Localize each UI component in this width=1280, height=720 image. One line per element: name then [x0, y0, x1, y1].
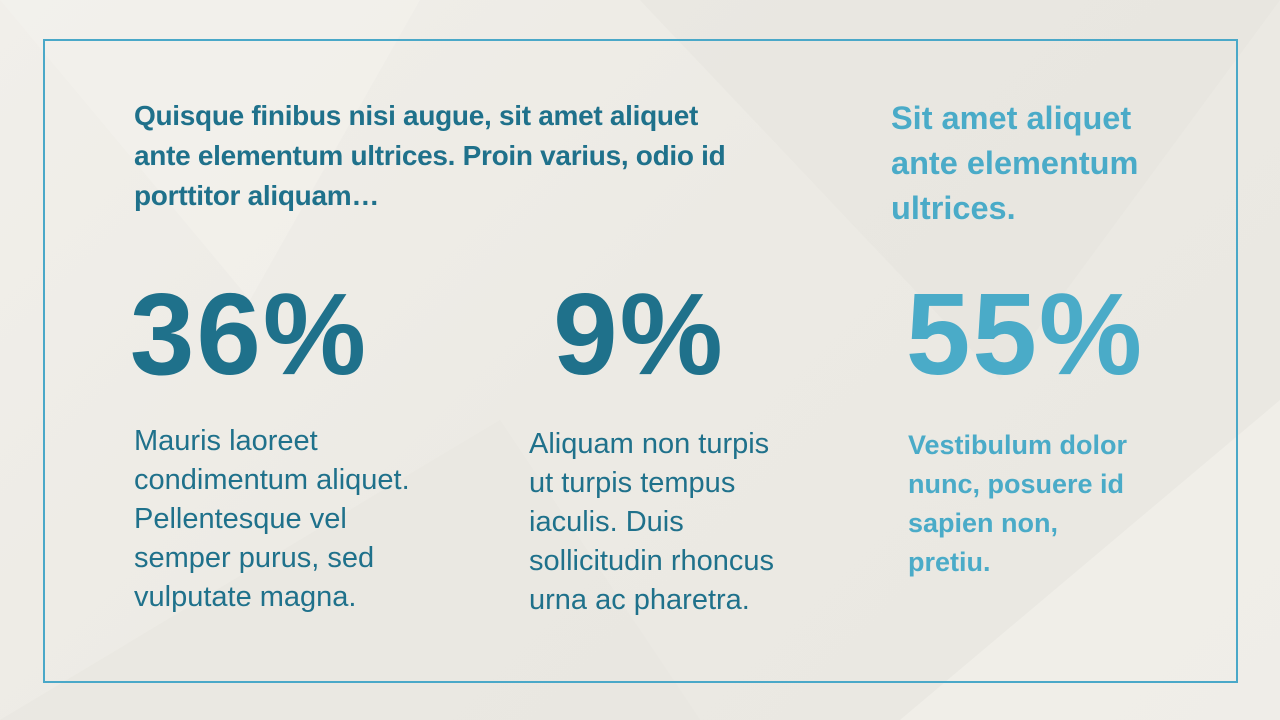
text column 2: iaculis. Duis [529, 506, 684, 538]
text column 1: vulputate magna. [134, 581, 356, 613]
text column 1: condimentum aliquet. [134, 464, 410, 496]
intro text [134, 100, 725, 211]
stat 9%: 9% [553, 269, 725, 399]
text column 1: Pellentesque vel [134, 503, 347, 535]
right heading: ultrices. [891, 190, 1016, 226]
text column 3: Vestibulum dolor [908, 430, 1127, 460]
stat 55%: 55% [906, 269, 1144, 399]
text column 2 [529, 428, 774, 616]
right heading [891, 100, 1138, 226]
text column 1 [134, 425, 410, 613]
text column 2: sollicitudin rhoncus [529, 545, 774, 577]
text column 3: nunc, posuere id [908, 469, 1124, 499]
right heading: Sit amet aliquet [891, 100, 1131, 136]
text column 3: pretiu. [908, 547, 991, 577]
stat 36%: 36% [130, 269, 368, 399]
text column 1: semper purus, sed [134, 542, 374, 574]
text column 2: Aliquam non turpis [529, 428, 769, 460]
text column 2: urna ac pharetra. [529, 584, 750, 616]
text column 2: ut turpis tempus [529, 467, 735, 499]
intro text: ante elementum ultrices. Proin varius, odio id [134, 140, 725, 171]
text column 3: sapien non, [908, 508, 1058, 538]
text column 1: Mauris laoreet [134, 425, 318, 457]
text column 3 [908, 430, 1127, 577]
intro text: Quisque finibus nisi augue, sit amet aliquet [134, 100, 698, 131]
intro text: porttitor aliquam… [134, 180, 379, 211]
right heading: ante elementum [891, 145, 1138, 181]
